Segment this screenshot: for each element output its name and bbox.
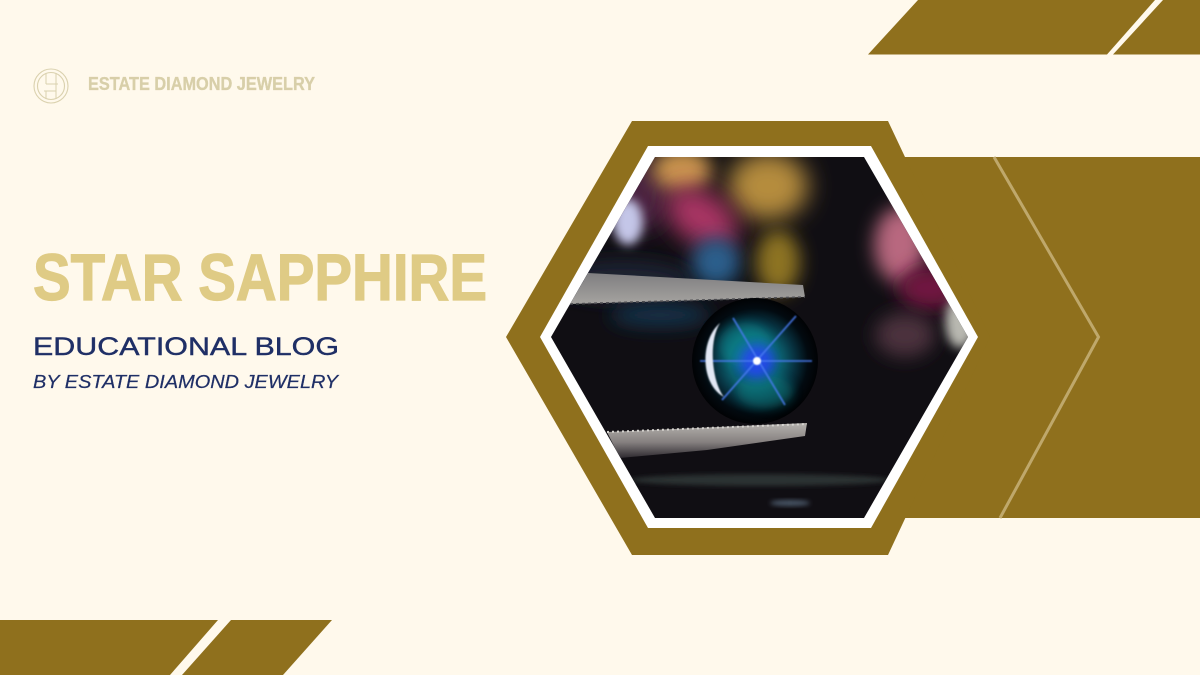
- top-right banner shapes: [868, 0, 1200, 54]
- white hexagon border: [540, 146, 978, 528]
- gem: [692, 298, 818, 424]
- upper tweezer blade: [570, 273, 805, 304]
- bokeh background: [552, 148, 975, 506]
- logo icon: [34, 69, 68, 103]
- subtitle: EDUCATIONAL BLOG: [33, 333, 339, 361]
- photo: star sapphire held in tweezers: [551, 157, 968, 518]
- gold hexagon frame: [506, 121, 990, 555]
- logo wordmark: ESTATE DIAMOND JEWELRY: [88, 74, 315, 94]
- title: STAR SAPPHIRE: [33, 240, 487, 314]
- lower tweezer blade: [607, 423, 807, 458]
- bottom-left banner shapes: [0, 620, 332, 675]
- chevron line: [994, 157, 1098, 518]
- gold arrow band: [880, 157, 1200, 518]
- byline: BY ESTATE DIAMOND JEWELRY: [33, 372, 340, 392]
